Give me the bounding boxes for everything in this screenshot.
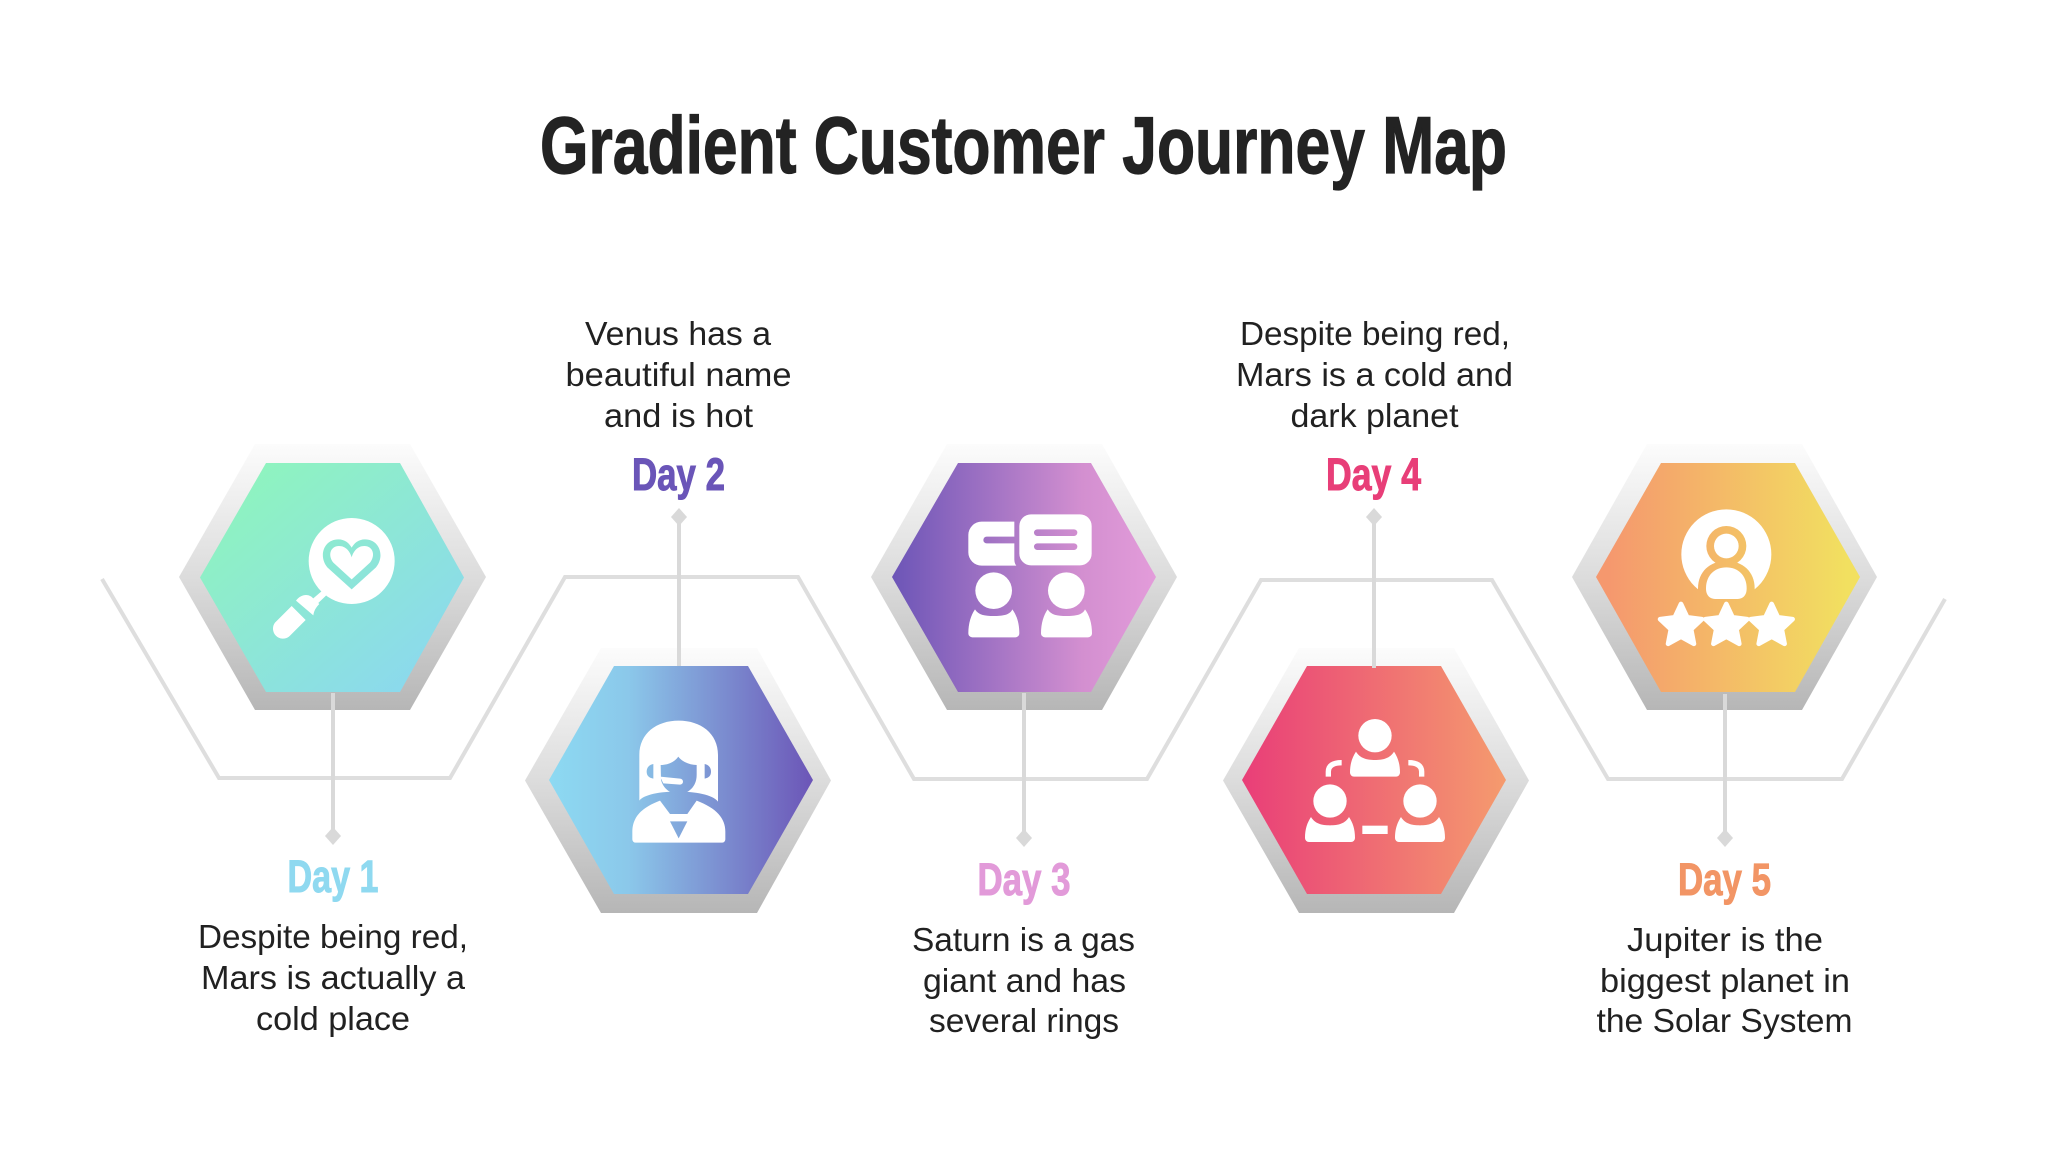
connector: day 2 <box>671 508 687 666</box>
text: day 2: beautiful name <box>566 357 792 394</box>
journey path line <box>102 577 1945 779</box>
hexagon: day 2 <box>549 666 813 894</box>
hexagon frame: day 3 <box>871 444 1177 710</box>
hexagon frame: day 2 <box>525 648 831 913</box>
connector: day 1 <box>325 693 341 845</box>
icon: support agent <box>632 721 725 843</box>
text: day 2: and is hot <box>604 398 754 435</box>
text: day 3: giant and has <box>923 963 1126 1000</box>
hexagon: day 4 <box>1242 666 1506 894</box>
text: day 5: the Solar System <box>1596 1003 1852 1040</box>
hexagon: day 1 <box>200 463 464 692</box>
panel: day 5 <box>1572 444 1877 1040</box>
text: day 1: Despite being red, <box>198 919 468 956</box>
text: day 5 <box>1596 922 1852 1040</box>
text: day 2 <box>566 316 792 435</box>
infographic canvas <box>100 114 1946 1039</box>
text: day 4: dark planet <box>1290 398 1459 435</box>
hexagon: day 5 <box>1596 463 1860 692</box>
text: day 5: biggest planet in <box>1600 963 1850 1000</box>
text: day 3 <box>912 922 1135 1040</box>
title: Gradient Customer Journey Map <box>540 101 1507 191</box>
panel: day 2 <box>525 316 831 913</box>
text: day 2: Venus has a <box>585 316 771 353</box>
panel: day 4 <box>1223 316 1529 913</box>
label: day 3: Day 3 <box>978 854 1070 905</box>
text: day 4: Despite being red, <box>1240 316 1510 353</box>
hexagon frame: day 4 <box>1223 648 1529 913</box>
text: day 4 <box>1236 316 1513 435</box>
label: day 1: Day 1 <box>288 851 378 902</box>
hexagon frame: day 5 <box>1572 444 1877 710</box>
text: day 3: Saturn is a gas <box>912 922 1135 959</box>
panel: day 3 <box>871 444 1177 1040</box>
text: day 1: Mars is actually a <box>201 960 465 997</box>
icon: user rating stars <box>1660 509 1793 644</box>
icon: team of three <box>1305 719 1445 842</box>
connector: day 5 <box>1717 694 1733 847</box>
label: day 5: Day 5 <box>1678 854 1771 905</box>
panel: day 1 <box>179 444 486 1038</box>
icon: magnifier with heart <box>273 518 395 639</box>
connector: day 3 <box>1016 693 1032 847</box>
icon: two people talking <box>968 514 1092 637</box>
label: day 4: Day 4 <box>1326 449 1421 500</box>
hexagon frame: day 1 <box>179 444 486 710</box>
text: day 1: cold place <box>256 1001 410 1038</box>
text: day 1 <box>198 919 468 1038</box>
connector: day 4 <box>1366 508 1382 668</box>
text: day 4: Mars is a cold and <box>1236 357 1513 394</box>
label: day 2: Day 2 <box>632 449 725 500</box>
text: day 3: several rings <box>929 1003 1119 1040</box>
text: day 5: Jupiter is the <box>1627 922 1823 959</box>
hexagon: day 3 <box>892 463 1156 692</box>
